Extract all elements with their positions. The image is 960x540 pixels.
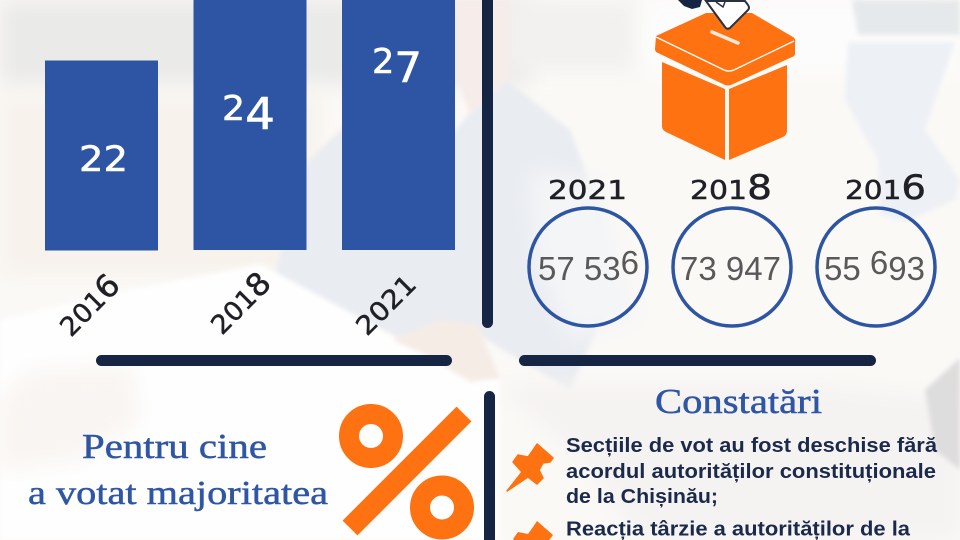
finding 1 <box>566 435 938 508</box>
lid <box>655 13 795 86</box>
finding 1: Secțiile de vot au fost deschise fără <box>566 435 938 457</box>
icon: pin 1 <box>507 444 553 491</box>
value 57 536: 57 53 <box>538 250 621 287</box>
value 55 693: 55 <box>824 250 861 287</box>
bar 2018 <box>194 0 306 250</box>
axis label 2016: 2016 <box>51 267 127 343</box>
heading: Pentru cine a votat majoritatea: a votat majoritatea <box>28 475 328 512</box>
finding 2: Reacția târzie a autorităților de la <box>566 518 911 540</box>
bar 2016 <box>45 60 158 250</box>
value 73 947: 73 947 <box>680 250 781 287</box>
heading: Constatari: Constatări <box>655 382 822 421</box>
box left side <box>662 62 725 160</box>
heading: Pentru cine a votat majoritatea <box>28 427 328 512</box>
icon: percent <box>349 414 464 530</box>
circle 2018 <box>673 208 791 326</box>
finding 1: de la Chișinău; <box>566 486 718 508</box>
value 24: 2 <box>222 89 244 129</box>
turnout by year <box>529 168 935 326</box>
year 2018: 2018 <box>690 168 772 208</box>
year 2016: 2016 <box>845 168 926 208</box>
year 2021: 2021 <box>548 176 627 206</box>
icon: ballot box <box>655 0 795 160</box>
value 27: 2 <box>372 42 394 82</box>
finding 1: acordul autorităților constituționale <box>566 461 936 483</box>
slot <box>712 32 738 43</box>
value 27: 7 <box>394 43 422 92</box>
bar chart: 2016, 2018, 2021 <box>45 0 455 343</box>
circle 2021 <box>529 208 647 326</box>
value 24: 4 <box>245 89 275 140</box>
circle 2016 <box>817 208 935 326</box>
value 22: 22 <box>79 140 128 180</box>
value 55 693: 93 <box>888 250 925 287</box>
axis label 2018: 2018 <box>202 265 278 341</box>
ballot <box>706 1 749 29</box>
bar 2021 <box>342 0 455 250</box>
value 57 536: 6 <box>621 244 639 281</box>
icon: pin 2 <box>513 521 553 540</box>
axis label 2021: 2021 <box>351 270 423 342</box>
heading: Pentru cine a votat majoritatea: Pentru cine <box>82 427 267 466</box>
box right side <box>729 65 787 160</box>
hand <box>678 0 702 9</box>
value 55 693: 6 <box>870 244 888 281</box>
